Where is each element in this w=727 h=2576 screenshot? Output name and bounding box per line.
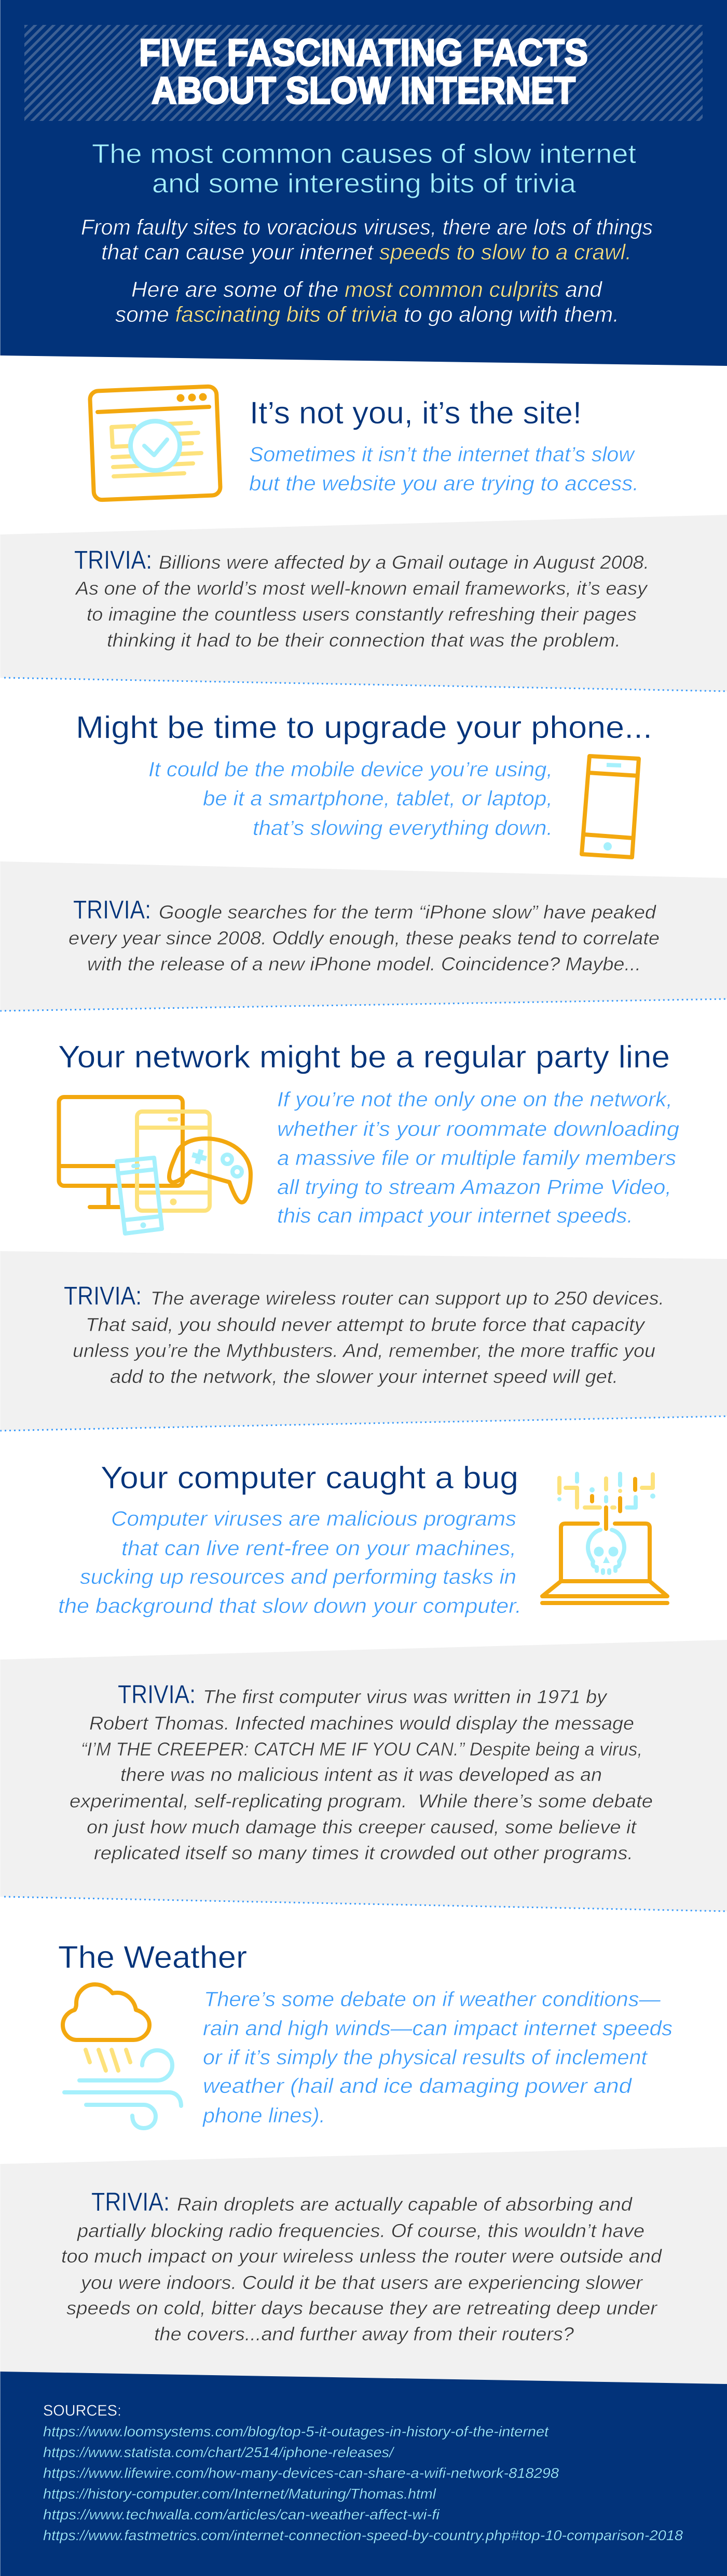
trivia text: speeds on cold, bitter days because they are retreating deep under	[66, 2297, 658, 2319]
intro text: that can cause your internet speeds to slow to a crawl.	[101, 240, 632, 264]
section 2: upgrade your phone	[76, 710, 652, 857]
icon: browser window with check	[90, 386, 221, 500]
trivia text: TRIVIA:	[74, 545, 152, 574]
game controller	[169, 1139, 251, 1202]
body text: whether it’s your roommate downloading	[277, 1118, 679, 1141]
trivia text	[74, 545, 649, 651]
trivia text: Billions were affected by a Gmail outage in August 2008.	[159, 552, 649, 573]
panel: trivia 2	[0, 861, 727, 1011]
sources list: https://www.statista.com/chart/2514/iphone-releases/	[43, 2444, 395, 2460]
sources list: https://history-computer.com/Internet/Maturing/Thomas.html	[43, 2486, 436, 2502]
heading: Might be time to upgrade your phone...	[76, 710, 652, 745]
trivia text	[61, 2187, 662, 2345]
body text	[148, 758, 553, 840]
trivia text: unless you’re the Mythbusters. And, remember, the more traffic you	[73, 1340, 655, 1361]
trivia text: The first computer virus was written in 1971 by	[203, 1686, 608, 1707]
subtitle: The most common causes of slow internet	[92, 139, 637, 169]
trivia text: the covers...and further away from their routers?	[154, 2323, 574, 2345]
trivia text: too much impact on your wireless unless the router were outside and	[61, 2245, 662, 2267]
trivia text	[68, 895, 660, 975]
body text: but the website you are trying to access.	[249, 472, 639, 495]
body text: sucking up resources and performing tasks in	[80, 1566, 516, 1588]
body text	[202, 1988, 673, 2127]
sources list: https://www.loomsystems.com/blog/top-5-it-outages-in-history-of-the-internet	[43, 2423, 549, 2440]
wind	[64, 2050, 181, 2128]
body text: If you’re not the only one on the network,	[277, 1088, 673, 1111]
rain	[86, 2050, 130, 2071]
sources list	[43, 2423, 683, 2543]
body text	[277, 1088, 679, 1227]
cloud	[63, 1984, 149, 2040]
heading: The Weather	[58, 1940, 247, 1975]
data streams	[557, 1474, 655, 1511]
trivia text: with the release of a new iPhone model. Coincidence? Maybe...	[87, 953, 641, 975]
heading: Your computer caught a bug	[101, 1460, 518, 1495]
body text: that can live rent-free on your machines,	[121, 1537, 516, 1560]
sources heading: SOURCES:	[43, 2402, 121, 2419]
panel: header	[0, 0, 727, 366]
heading: It’s not you, it’s the site!	[250, 395, 582, 430]
body text: the background that slow down your computer.	[58, 1595, 522, 1618]
section 4: computer caught a bug	[58, 1460, 667, 1618]
body text: phone lines).	[202, 2104, 325, 2127]
subtitle	[92, 139, 637, 199]
trivia text: Robert Thomas. Infected machines would display the message	[89, 1712, 634, 1734]
trivia text: partially blocking radio frequencies. Of course, this wouldn’t have	[77, 2220, 644, 2241]
tablet	[137, 1112, 210, 1211]
icon: cloud, rain and wind	[63, 1984, 181, 2128]
panel: trivia 3	[0, 1251, 727, 1431]
trivia text: That said, you should never attempt to brute force that capacity	[86, 1314, 646, 1335]
trivia text: “I’M THE CREEPER: CATCH ME IF YOU CAN.” Despite being a virus,	[81, 1738, 642, 1760]
body text: that’s slowing everything down.	[253, 817, 553, 840]
trivia text: you were indoors. Could it be that users are experiencing slower	[79, 2272, 643, 2293]
body text	[249, 443, 639, 495]
trivia text	[70, 1680, 653, 1864]
title banner: ABOUT SLOW INTERNET	[152, 70, 575, 112]
panel: trivia 1	[0, 515, 727, 691]
laptop	[542, 1508, 667, 1603]
subtitle: and some interesting bits of trivia	[152, 169, 576, 199]
heading: Your network might be a regular party line	[58, 1039, 670, 1074]
body text: this can impact your internet speeds.	[277, 1204, 633, 1227]
panel: trivia 4	[0, 1640, 727, 1911]
intro text: some fascinating bits of trivia to go along with them.	[115, 302, 619, 326]
body text: be it a smartphone, tablet, or laptop,	[203, 787, 553, 810]
trivia text: on just how much damage this creeper caused, some believe it	[87, 1816, 637, 1838]
trivia text: TRIVIA:	[73, 895, 151, 924]
trivia text: TRIVIA:	[64, 1281, 142, 1310]
panel: sources footer	[0, 2372, 727, 2576]
trivia text: The average wireless router can support up to 250 devices.	[150, 1287, 664, 1309]
trivia text: Rain droplets are actually capable of absorbing and	[177, 2194, 633, 2215]
title banner: FIVE FASCINATING FACTS	[139, 32, 588, 74]
body text: Sometimes it isn’t the internet that’s slow	[249, 443, 636, 466]
trivia text: replicated itself so many times it crowded out other programs.	[94, 1842, 633, 1864]
trivia text: As one of the world’s most well-known email frameworks, it’s easy	[75, 578, 648, 599]
trivia text: TRIVIA:	[118, 1680, 196, 1709]
trivia text: add to the network, the slower your internet speed will get.	[110, 1366, 618, 1387]
icon: smartphone	[582, 756, 639, 857]
skull	[588, 1530, 624, 1573]
trivia text: to imagine the countless users constantly refreshing their pages	[87, 604, 637, 625]
trivia text: TRIVIA:	[91, 2187, 170, 2216]
intro text: Here are some of the most common culprits and	[131, 277, 603, 302]
monitor	[59, 1097, 183, 1207]
icon: devices and game controller	[59, 1097, 251, 1234]
icon: infected laptop with skull	[542, 1474, 667, 1603]
trivia text: thinking it had to be their connection that was the problem.	[107, 629, 621, 651]
panel: trivia 5	[0, 2147, 727, 2384]
trivia text	[64, 1281, 664, 1387]
title banner	[24, 25, 703, 121]
trivia text: Google searches for the term “iPhone slow” have peaked	[159, 901, 656, 923]
intro text: From faulty sites to voracious viruses, there are lots of things	[81, 215, 653, 239]
section 5: the weather	[58, 1940, 673, 2128]
section 1: it's the site	[90, 386, 639, 500]
phone	[117, 1158, 162, 1234]
section 3: party line network	[58, 1039, 679, 1234]
body text: Computer viruses are malicious programs	[111, 1508, 516, 1530]
body text	[58, 1508, 522, 1618]
sources list: https://www.techwalla.com/articles/can-weather-affect-wi-fi	[43, 2506, 440, 2523]
body text: a massive file or multiple family members	[277, 1147, 676, 1170]
trivia text: experimental, self-replicating program. While there’s some debate	[70, 1790, 653, 1812]
trivia text: there was no malicious intent as it was developed as an	[120, 1764, 602, 1785]
trivia text: every year since 2008. Oddly enough, these peaks tend to correlate	[68, 927, 660, 949]
body text: weather (hail and ice damaging power and	[203, 2075, 633, 2098]
body text: There’s some debate on if weather conditions—	[204, 1988, 661, 2011]
body text: rain and high winds—can impact internet speeds	[203, 2017, 673, 2040]
body text: all trying to stream Amazon Prime Video,	[277, 1176, 671, 1199]
sources list: https://www.lifewire.com/how-many-devices-can-share-a-wifi-network-818298	[43, 2465, 559, 2481]
intro text	[81, 215, 653, 326]
sources list: https://www.fastmetrics.com/internet-connection-speed-by-country.php#top-10-comparison-2018	[43, 2527, 683, 2543]
body text: or if it’s simply the physical results of inclement	[203, 2046, 648, 2069]
body text: It could be the mobile device you’re using,	[148, 758, 553, 781]
